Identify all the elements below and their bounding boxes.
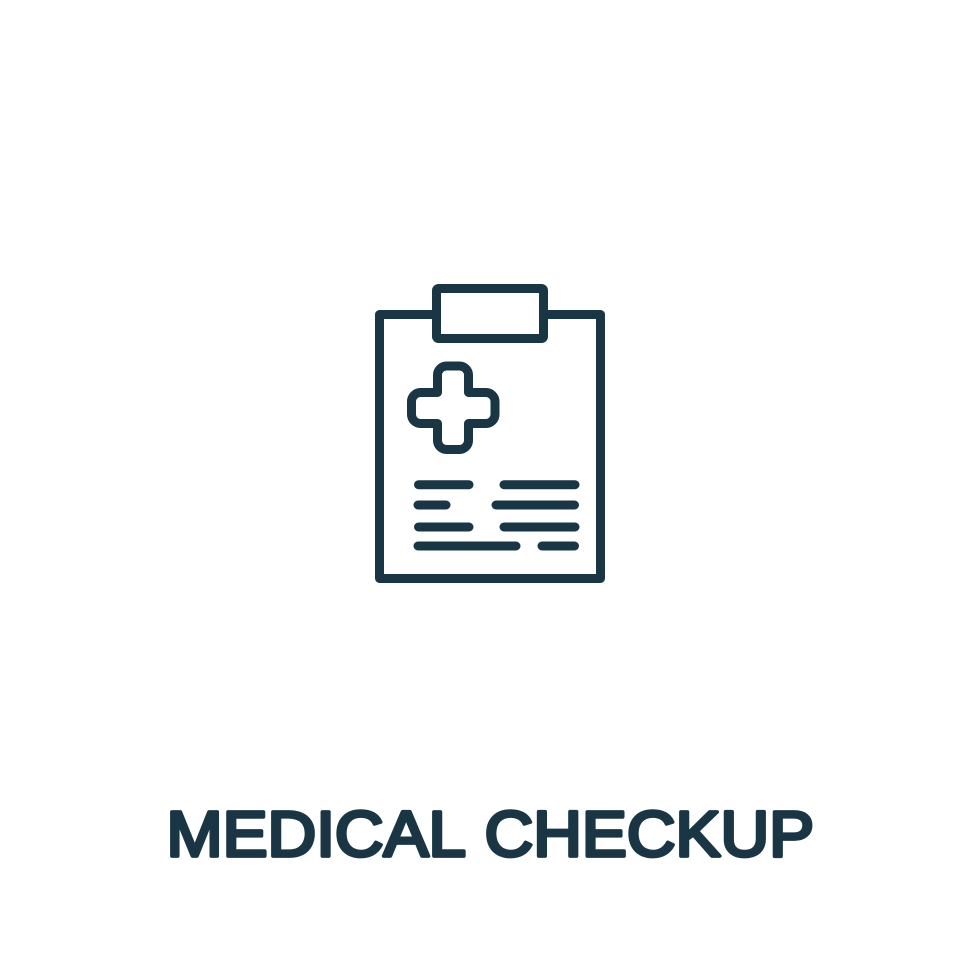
title: MEDICAL [166, 798, 466, 870]
clipboard clip [436, 288, 544, 338]
clipboard board [380, 314, 600, 578]
report text lines [418, 485, 575, 546]
title: CHECKUP [485, 798, 814, 870]
icon: medical cross [412, 366, 495, 450]
title [166, 798, 814, 870]
icon: medical clipboard [380, 288, 600, 578]
